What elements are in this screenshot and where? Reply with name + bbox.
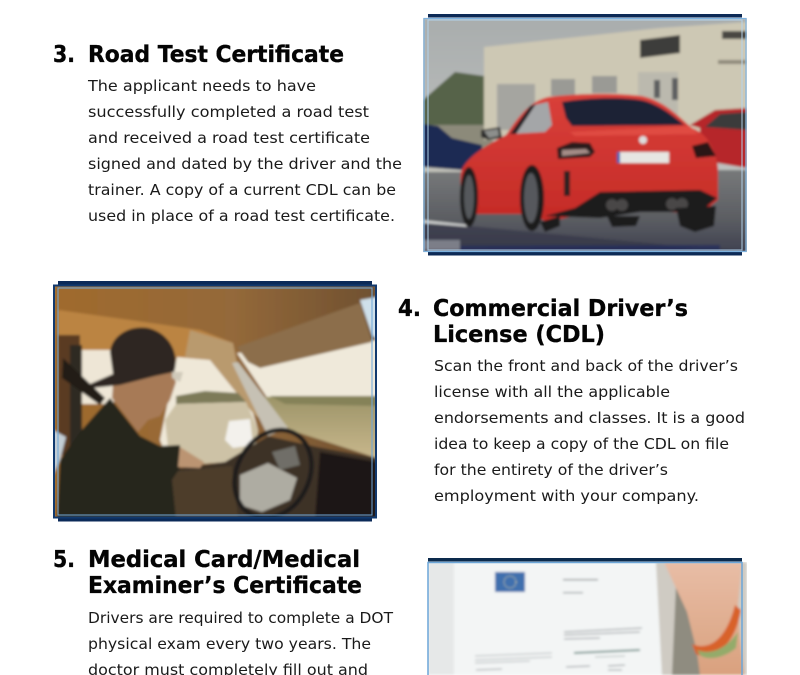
photo: driver in truck cab: [53, 281, 377, 532]
side mirror: [225, 419, 253, 448]
seat left: [53, 430, 66, 475]
body text: commercial driver's license: license with all the applicable: [434, 383, 670, 401]
photo: red car on wet track: [423, 14, 747, 256]
glasses: [172, 372, 183, 382]
heading: road test certificate: Road Test Certificate: [88, 42, 344, 68]
section 3: road test certificate text: [53, 42, 402, 225]
body text: road test certificate: and received a road test certificate: [88, 129, 370, 147]
body text: road test certificate: signed and dated by the driver and the: [88, 155, 402, 173]
heading: medical card: [53, 547, 362, 599]
heading: commercial driver's license: Commercial Driver’s: [433, 296, 688, 322]
frame: [58, 281, 372, 284]
sun visor: [237, 303, 372, 368]
cap: [90, 327, 176, 388]
a pillar: [232, 362, 288, 436]
body text: road test certificate: The applicant needs to have: [87, 77, 316, 95]
body text: commercial driver's license: for the entirety of the driver’s: [434, 461, 668, 479]
photo: medical certificate document: [428, 558, 747, 675]
body text: medical card: Drivers are required to complete a DOT: [88, 609, 394, 627]
body text: medical card: physical exam every two years. The: [88, 635, 371, 653]
windshield: [236, 338, 375, 399]
section 4: commercial driver's license text: [398, 296, 745, 505]
seatbelt: [62, 358, 105, 405]
frame: [428, 558, 742, 562]
heading: commercial driver's license: 4.: [398, 296, 421, 322]
heading: medical card: Examiner’s Certificate: [88, 573, 362, 599]
hand: [178, 447, 204, 468]
left window: [82, 350, 114, 404]
neck and face: [112, 370, 176, 432]
heading: medical card: 5.: [53, 547, 75, 573]
door and dash: [165, 436, 377, 518]
body text: road test certificate: used in place of a road test certificate.: [88, 207, 395, 225]
frame: [428, 14, 742, 18]
body text: road test certificate: [87, 77, 402, 225]
left door pillar: [58, 335, 80, 455]
body text: commercial driver's license: Scan the front and back of the driver’s: [434, 357, 738, 375]
body text: commercial driver's license: idea to keep a copy of the CDL on file: [434, 435, 729, 453]
section 5: medical card text: [53, 547, 394, 675]
heading: road test certificate: 3.: [53, 42, 75, 68]
wheel hub: [240, 463, 297, 512]
body text: medical card: [88, 609, 394, 675]
body text: road test certificate: trainer. A copy of a current CDL can be: [88, 181, 396, 199]
heading: medical card: Medical Card/Medical: [88, 547, 360, 573]
heading: commercial driver's license: License (CDL): [433, 322, 605, 348]
corner sky: [360, 297, 377, 340]
side window: [158, 355, 259, 448]
steering wheel: [232, 426, 314, 516]
lower headliner band: [57, 310, 226, 358]
ceiling base: [53, 285, 377, 518]
heading: commercial driver's license: [398, 296, 688, 348]
body text: commercial driver's license: endorsements and classes. It is a good: [434, 409, 745, 427]
body text: commercial driver's license: employment with your company.: [434, 487, 699, 505]
jacket: [57, 398, 180, 518]
body text: commercial driver's license: [434, 357, 745, 505]
body text: road test certificate: successfully completed a road test: [88, 103, 369, 121]
